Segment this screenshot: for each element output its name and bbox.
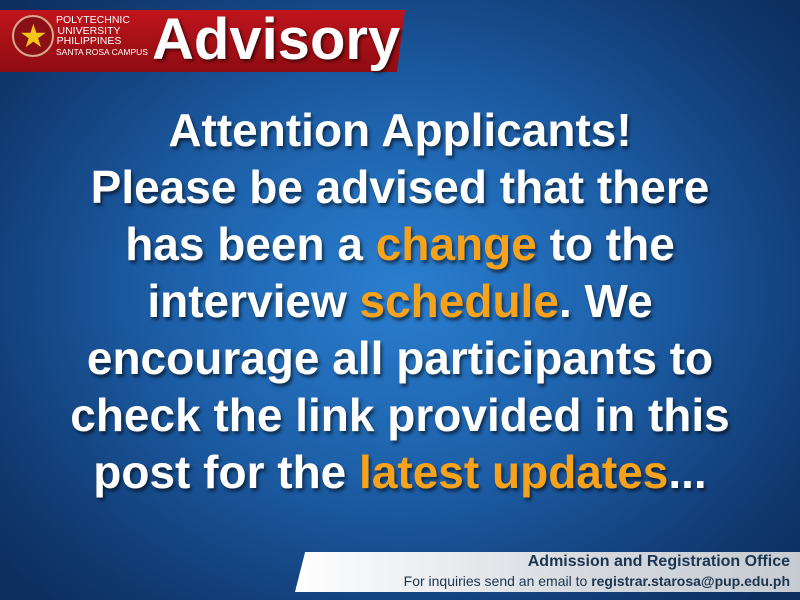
icon: university logo: ★ xyxy=(19,18,48,54)
footer contact panel: For inquiries send an email to registrar.starosa@pup.edu.ph xyxy=(404,573,790,589)
header banner xyxy=(0,10,405,72)
main message: encourage all participants to xyxy=(87,332,713,384)
university name: POLYTECHNIC xyxy=(56,14,130,26)
main message: interview schedule. We xyxy=(147,275,653,327)
main message: Attention Applicants! xyxy=(168,104,632,156)
university name: SANTA ROSA CAMPUS xyxy=(56,46,148,56)
main message: check the link provided in this xyxy=(70,389,730,441)
footer contact panel: Admission and Registration Office xyxy=(528,553,790,570)
main message: Please be advised that there xyxy=(91,161,709,213)
university name xyxy=(56,14,148,56)
university name: UNIVERSITY xyxy=(57,24,120,36)
university name: PHILIPPINES xyxy=(57,35,121,47)
title: Advisory xyxy=(152,7,400,72)
footer contact panel xyxy=(295,552,800,592)
main message: post for the latest updates... xyxy=(93,446,707,498)
main message xyxy=(70,104,732,502)
icon: university logo xyxy=(12,15,54,57)
main message: has been a change to the xyxy=(125,218,675,270)
